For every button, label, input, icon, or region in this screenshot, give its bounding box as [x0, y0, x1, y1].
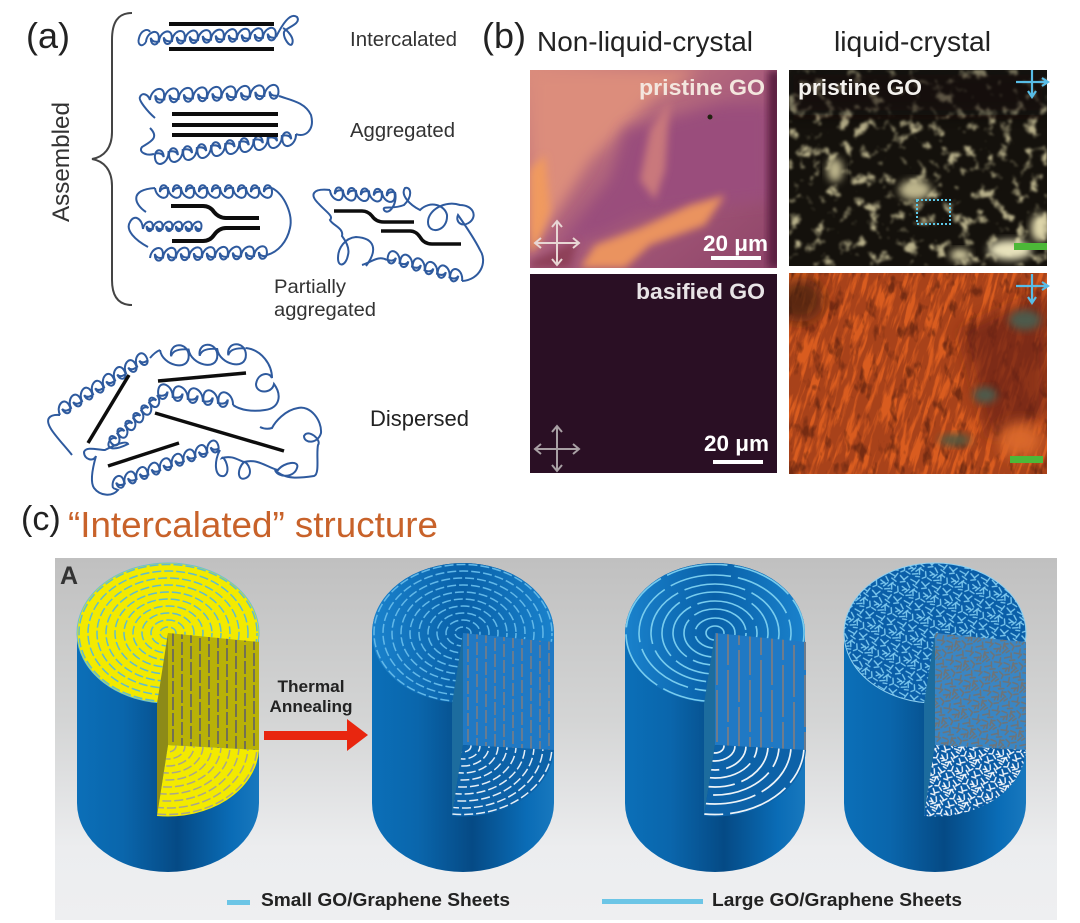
- partially aggregated diagram right: [314, 187, 483, 284]
- legend: large sheets: Large GO/Graphene Sheets: [712, 889, 962, 910]
- legend: small sheets: Small GO/Graphene Sheets: [261, 889, 510, 910]
- partially aggregated label: Partially: [274, 276, 346, 298]
- panel c: thermal annealing schematic: [55, 558, 1057, 920]
- cylinder 2: blue small sheets: [372, 563, 554, 872]
- column heading non-liquid-crystal: Non-liquid-crystal: [537, 26, 753, 57]
- partially aggregated diagram left: [129, 185, 291, 261]
- icon: polarizer cross: [535, 221, 579, 265]
- icon: polarizer cross: [1016, 70, 1048, 97]
- icon: polarizer cross: [535, 426, 579, 471]
- micrograph: basified GO non-liquid-crystal: [530, 274, 777, 473]
- panel c label: (c): [21, 500, 61, 538]
- scale bar 20 um: 20 μm: [704, 431, 769, 456]
- partially aggregated label: [274, 276, 376, 321]
- annealing arrow and label: [264, 677, 368, 751]
- cylinder 4: disordered sheets: [844, 563, 1026, 872]
- scale bar: [1014, 243, 1047, 250]
- micrograph: liquid-crystal orange: [789, 273, 1050, 474]
- thermal annealing label: [270, 677, 352, 716]
- legend: large sheets: [602, 889, 962, 910]
- scale bar: [1010, 456, 1043, 463]
- aggregated diagram: [140, 85, 312, 165]
- dispersed label: Dispersed: [370, 406, 469, 431]
- column heading liquid-crystal: liquid-crystal: [834, 26, 991, 57]
- scale bar 20 um: 20 μm: [703, 231, 768, 256]
- schematic background: [55, 558, 1057, 920]
- panel c heading: [21, 500, 438, 545]
- assembled label: Assembled: [48, 102, 75, 222]
- thermal annealing label: Annealing: [270, 697, 352, 716]
- brace: [92, 13, 132, 305]
- red arrow: [264, 719, 368, 751]
- dotted selection box: [917, 200, 950, 224]
- panel b: polarized optical micrographs: [484, 22, 1050, 474]
- aggregated label: Aggregated: [350, 120, 455, 142]
- panel a label: (a): [26, 15, 70, 56]
- thermal annealing label: Thermal: [278, 677, 344, 696]
- micrograph: pristine GO non-liquid-crystal: [530, 70, 782, 268]
- panel tag A: A: [60, 562, 78, 590]
- label pristine GO: pristine GO: [639, 75, 765, 100]
- panel a: polymer and sheet morphologies: [26, 13, 483, 495]
- label basified GO: basified GO: [636, 279, 765, 304]
- icon: polarizer cross: [1016, 274, 1048, 303]
- micrograph: pristine GO liquid-crystal: [789, 70, 1049, 266]
- cylinder 3: blue large sheets: [625, 563, 806, 872]
- partially aggregated label: aggregated: [274, 299, 376, 321]
- intercalated label: Intercalated: [350, 29, 457, 51]
- label pristine GO: pristine GO: [798, 75, 922, 100]
- orange title: “Intercalated” structure: [68, 504, 438, 545]
- dispersed diagram: [48, 344, 321, 495]
- panel b label: (b): [482, 15, 526, 56]
- intercalated diagram: [139, 16, 298, 51]
- cylinder 1: yellow small sheets: [77, 563, 259, 872]
